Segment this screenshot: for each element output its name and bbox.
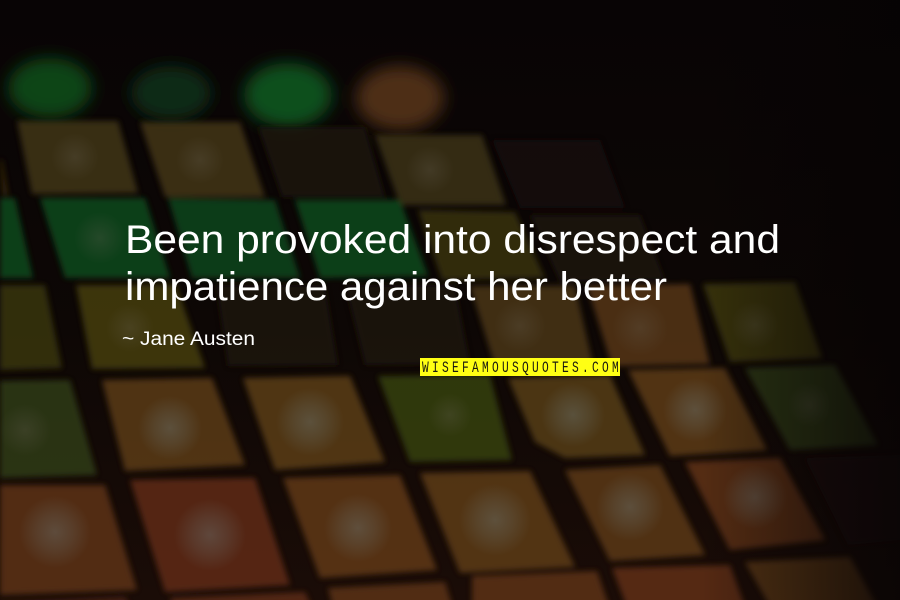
quote line 1: Been provoked into disrespect and <box>125 218 780 262</box>
quote text <box>125 218 780 309</box>
top row of round green and orange lights <box>8 58 444 130</box>
row 3 <box>0 285 62 370</box>
row 4 <box>0 380 97 478</box>
row 6 <box>0 597 135 600</box>
author attribution: ~ Jane Austen <box>122 329 255 350</box>
row 1 <box>0 160 8 195</box>
row 5 <box>0 485 137 595</box>
quote line 2: impatience against her better <box>125 265 667 309</box>
pad centre glows <box>0 133 832 571</box>
row 2 <box>0 198 33 278</box>
square pads <box>0 121 900 600</box>
watermark badge: WISEFAMOUSQUOTES.COM <box>422 360 619 378</box>
